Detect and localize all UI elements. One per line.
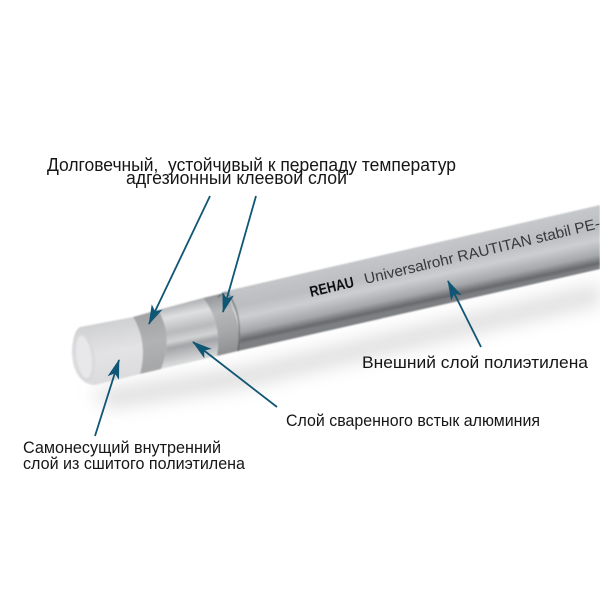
label: outer layer: Внешний слой полиэтилена	[362, 353, 589, 372]
illustration: layered pipe	[72, 205, 600, 385]
welded aluminium layer	[158, 298, 218, 369]
outer polyethylene layer	[222, 205, 600, 351]
outer sheath cut edge	[218, 293, 239, 351]
pipe shadow	[90, 284, 600, 408]
label: inner layer	[23, 438, 246, 473]
label: adhesive layer: Долговечный, устойчивый к перепаду температур	[47, 155, 456, 175]
arrow: inner layer	[95, 360, 119, 436]
label: inner layer: Самонесущий внутренний	[23, 438, 221, 457]
core opening	[72, 333, 96, 381]
label: aluminium layer: Слой сваренного встык алюминия	[286, 411, 540, 430]
arrow: outer layer	[448, 281, 481, 347]
inner cross-linked polyethylene core	[72, 317, 143, 385]
adhesive layer near core	[133, 310, 167, 374]
arrow: adhesive layer near sheath	[223, 196, 256, 312]
pipe printing: REHAU	[308, 274, 356, 301]
arrow: adhesive layer near core	[149, 196, 210, 324]
label: adhesive layer	[47, 155, 456, 188]
arrow: aluminium layer	[193, 342, 277, 407]
pipe printing	[308, 215, 600, 301]
label: adhesive layer: адгезионный клеевой слой	[126, 168, 347, 188]
label: inner layer: слой из сшитого полиэтилена	[23, 454, 246, 473]
adhesive layer near outer sheath	[203, 293, 239, 356]
pipe printing: Universalrohr RAUTITAN stabil PE-	[362, 215, 600, 288]
